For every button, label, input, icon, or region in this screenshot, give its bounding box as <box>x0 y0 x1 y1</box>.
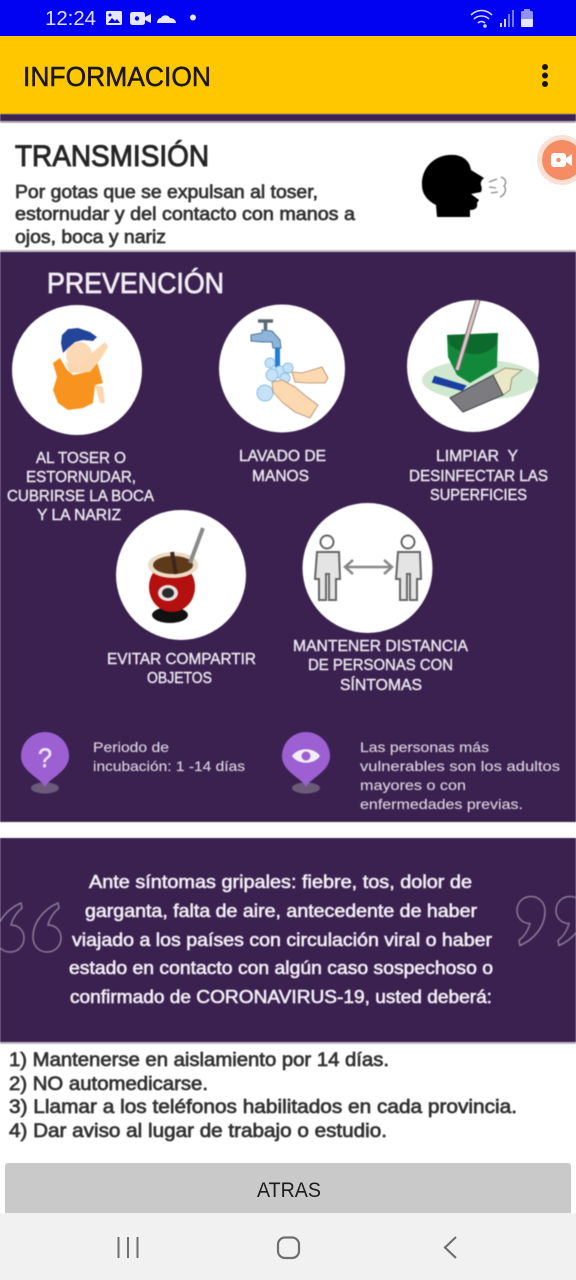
icon: home <box>278 1238 299 1258</box>
label: LAVADO DE <box>239 448 326 465</box>
icon: decorative opening quote mark <box>0 903 61 952</box>
label <box>293 638 468 694</box>
button: back <box>5 1163 571 1215</box>
icon: battery <box>521 9 533 27</box>
icon: video notification <box>130 12 151 25</box>
incubation note <box>21 732 245 794</box>
label <box>7 450 154 524</box>
button: back: ATRAS <box>257 1179 321 1202</box>
app title: INFORMACION <box>23 61 211 92</box>
icon: notification dot <box>190 14 196 20</box>
label: Y LA NARIZ <box>37 507 121 524</box>
panel: actions list <box>0 1042 576 1163</box>
panel: transmission <box>0 121 576 252</box>
symptoms text: estado en contacto con algún caso sospechoso o <box>69 958 493 978</box>
symptoms text: garganta, falta de aire, antecedente de haber <box>85 901 477 921</box>
icon: tap and hands <box>251 321 328 418</box>
label: AL TOSER O <box>36 450 126 467</box>
clock: 12:24 <box>45 8 96 30</box>
vulnerable people text: mayores o con <box>360 777 466 793</box>
item: cover cough <box>7 305 154 524</box>
icon: question pin <box>21 732 69 794</box>
symptoms text: confirmado de CORONAVIRUS-19, usted deberá: <box>70 987 492 1007</box>
icon: overflow menu <box>542 64 548 87</box>
vulnerable people note <box>282 732 560 812</box>
icon: eye pin <box>282 732 330 794</box>
panel: actions list: 3) Llamar a los teléfonos habilitados en cada provincia. <box>9 1097 517 1118</box>
icon: back chevron <box>445 1237 456 1258</box>
icon: speaking head <box>422 155 506 217</box>
transmission text: estornudar y del contacto con manos a <box>15 204 356 224</box>
incubation text: Periodo de <box>93 739 169 755</box>
icon: signal bars <box>500 10 514 27</box>
transmission text: ojos, boca y nariz <box>15 227 166 247</box>
panel: prevention <box>0 252 576 822</box>
status bar <box>0 0 576 36</box>
white separator <box>0 823 576 837</box>
navigation bar <box>0 1213 576 1280</box>
label: MANOS <box>252 468 309 485</box>
label <box>107 651 256 687</box>
label: OBJETOS <box>147 670 212 687</box>
vulnerable people text: vulnerables son los adultos <box>360 758 560 774</box>
heading: prevention: PREVENCIÓN <box>47 267 224 300</box>
label: SÍNTOMAS <box>340 675 422 694</box>
panel: actions list: 1) Mantenerse en aislamiento por 14 días. <box>9 1050 389 1071</box>
item: hand washing <box>219 304 345 485</box>
symptoms text: viajado a los países con circulación viral o haber <box>72 930 492 950</box>
vulnerable people text: enfermedades previas. <box>360 796 523 812</box>
icon: recent apps <box>118 1237 138 1258</box>
icon: question pin: ? <box>38 743 52 773</box>
top purple strip <box>0 114 576 122</box>
heading: transmission: TRANSMISIÓN <box>15 140 209 173</box>
app bar <box>0 36 576 114</box>
icon: image notification <box>106 11 122 25</box>
symptoms text: Ante síntomas gripales: fiebre, tos, dolor de <box>89 872 472 892</box>
label: ESTORNUDAR, <box>26 469 136 486</box>
panel: symptoms <box>0 838 576 1043</box>
label: CUBRIRSE LA BOCA <box>7 488 154 505</box>
vulnerable people text: Las personas más <box>360 739 489 755</box>
icon: two people and arrow <box>315 536 421 600</box>
symptoms text <box>69 872 493 1007</box>
icon: floating record button <box>537 135 576 185</box>
icon: wifi <box>471 10 492 27</box>
label: DESINFECTAR LAS <box>409 468 548 485</box>
label <box>409 448 548 504</box>
incubation text <box>93 739 245 774</box>
transmission text: Por gotas que se expulsan al toser, <box>15 182 318 202</box>
incubation text: incubación: 1 -14 días <box>93 758 245 774</box>
item: keep distance <box>293 503 468 694</box>
label <box>239 448 326 485</box>
icon: mate gourd <box>148 528 203 623</box>
icon: cloud notification <box>157 15 176 23</box>
label: DE PERSONAS CON <box>308 657 453 674</box>
panel: actions list: 2) NO automedicarse. <box>9 1074 208 1095</box>
transmission text <box>15 182 356 247</box>
label: SUPERFICIES <box>430 487 527 504</box>
icon: decorative closing quote mark <box>517 896 576 946</box>
panel: actions list: 4) Dar aviso al lugar de trabajo o estudio. <box>9 1121 387 1142</box>
label: EVITAR COMPARTIR <box>107 651 256 668</box>
vulnerable people text <box>360 739 560 812</box>
icon: person coughing <box>53 328 108 410</box>
icon: bucket and mop <box>422 300 538 412</box>
label: MANTENER DISTANCIA <box>293 638 468 655</box>
item: do not share objects <box>107 510 256 687</box>
item: clean surfaces <box>407 300 548 504</box>
label: LIMPIAR Y <box>436 448 518 465</box>
